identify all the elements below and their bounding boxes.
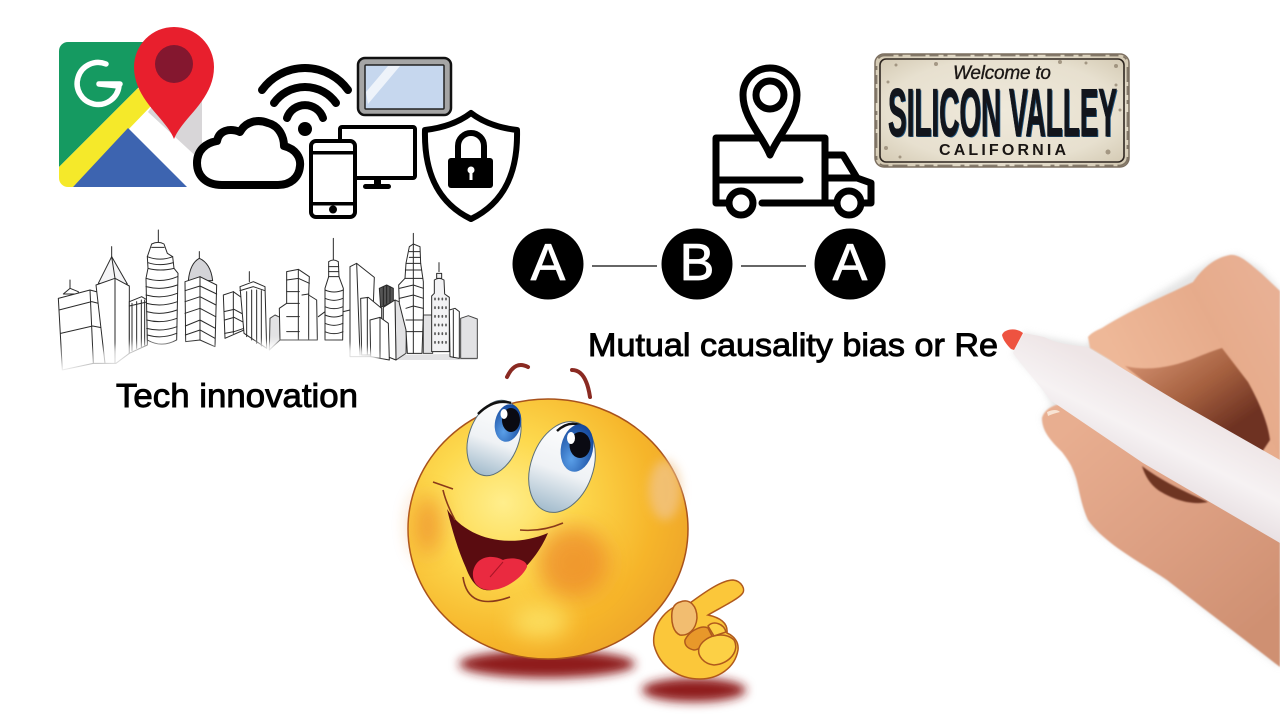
banded tower: [157, 230, 160, 243]
upper fingers: [1088, 255, 1280, 470]
sign: Welcome to Silicon Valley California: [875, 54, 1129, 167]
pointing hand: [654, 580, 744, 679]
node A: [512, 228, 584, 300]
illustration: hand holding marker: [1002, 255, 1280, 667]
marker: [1002, 329, 1280, 543]
heading: Tech innovation: Tech innovation: [116, 377, 358, 414]
right eye: [517, 412, 607, 522]
shaded ground and back buildings: [269, 300, 477, 360]
icon: wifi: [262, 68, 348, 136]
node A: A: [531, 234, 566, 292]
mouth: [433, 482, 563, 602]
illustration: city skyline: [58, 230, 477, 370]
tower 2: [332, 238, 335, 259]
domed building: [188, 258, 213, 281]
right group: [350, 263, 382, 357]
soft halo around hand: [1013, 255, 1280, 667]
lower hand and thumb: [1042, 404, 1280, 667]
icon: phone: [311, 141, 355, 217]
sign: Welcome to Silicon Valley California: CALIFORNIA: [939, 142, 1066, 159]
node B: B: [680, 234, 714, 292]
icon: google maps: [59, 27, 214, 187]
sign: Welcome to Silicon Valley California: Welcome to: [953, 63, 1051, 84]
icon: security shield: [425, 113, 517, 219]
icon: cloud: [197, 121, 300, 185]
illustration: smiling emoji: [408, 365, 746, 702]
face: [408, 399, 688, 659]
map pin: [134, 27, 214, 139]
mid group: [223, 292, 245, 338]
node B: [662, 228, 732, 300]
google G letter: [77, 62, 120, 104]
eyebrows: [507, 365, 590, 397]
left eye: [457, 393, 531, 483]
rust specks: [884, 60, 1122, 158]
shadow between fingers: [1125, 348, 1270, 452]
tongue: [473, 557, 527, 590]
icon: delivery truck with location pin: [716, 68, 871, 215]
cheeks: [415, 495, 609, 598]
skyline fade: [50, 342, 380, 374]
location pin: [743, 68, 797, 155]
node A return: [814, 228, 886, 300]
ground shadows: [459, 650, 746, 702]
diagram: A-B-A mutual causality chain: [512, 228, 886, 300]
icon: desktop monitor: [340, 127, 415, 189]
heading: Mutual causality bias: Mutual causality bias or Re: [588, 327, 998, 363]
node A return: A: [833, 234, 868, 292]
icon: tablet: [358, 58, 451, 115]
marker tip: [1002, 329, 1023, 350]
left group: [63, 280, 78, 294]
